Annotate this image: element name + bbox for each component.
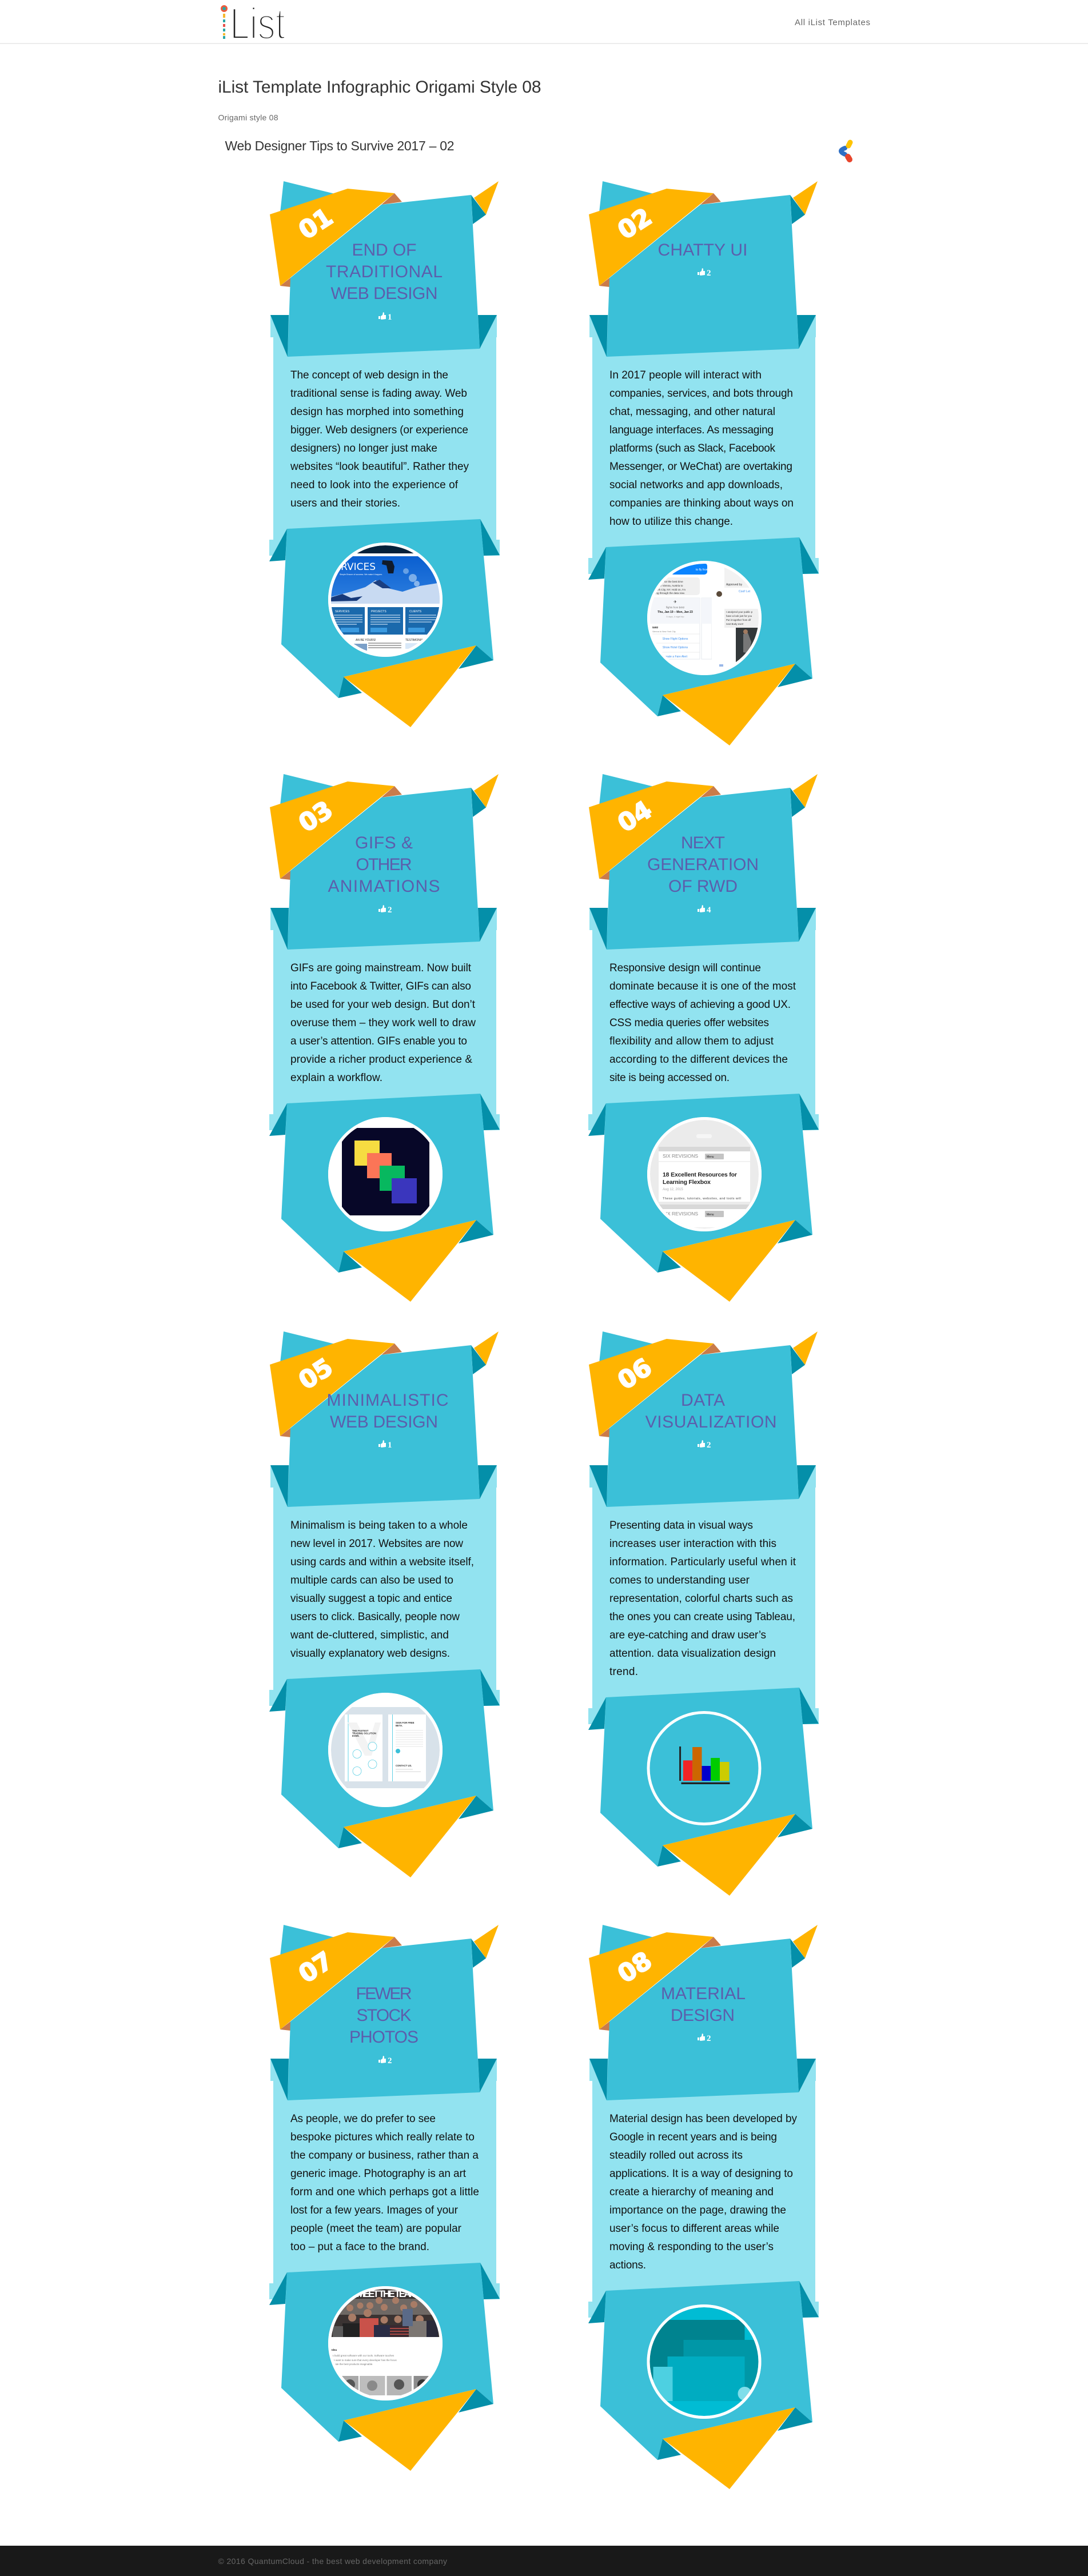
body text: chat, messaging, and other natural bbox=[609, 406, 775, 418]
body text: Material design has been developed by bbox=[609, 2113, 797, 2125]
number ribbon bbox=[270, 781, 394, 879]
folded header bbox=[589, 181, 818, 357]
image: responsive phone page: Menu bbox=[707, 1213, 714, 1217]
likes bbox=[698, 905, 711, 915]
body text: create a hierarchy of meaning and bbox=[609, 2186, 774, 2198]
body text: traditional sense is fading away. Web bbox=[290, 388, 467, 400]
image: chat interface: flights from $482 bbox=[666, 606, 685, 609]
body text: bespoke pictures which really relate to bbox=[290, 2131, 475, 2143]
folded header bbox=[270, 1331, 499, 1507]
body text: Presenting data in visual ways bbox=[609, 1520, 753, 1532]
body text: how to utilize this change. bbox=[609, 516, 733, 528]
likes bbox=[378, 905, 392, 915]
nav link: All iList Templates bbox=[795, 18, 870, 27]
image: chat interface: from Vienna, Austria to bbox=[656, 584, 683, 587]
body text: In 2017 people will interact with bbox=[609, 369, 762, 381]
heading: END OF bbox=[352, 241, 416, 260]
heading bbox=[645, 1391, 777, 1431]
body text: steadily rolled out across its bbox=[609, 2150, 743, 2162]
body text bbox=[290, 2113, 479, 2253]
body text: explain a workflow. bbox=[290, 1072, 382, 1084]
panel: card 02 bbox=[588, 181, 819, 745]
image: team page: to build great software with our tools. Software touches bbox=[332, 2354, 394, 2357]
heading: MINIMALISTIC bbox=[327, 1391, 448, 1410]
heading: VISUALIZATION bbox=[645, 1413, 777, 1431]
heading bbox=[328, 834, 440, 896]
number ribbon: 08 bbox=[613, 1947, 657, 1989]
heading: OF RWD bbox=[668, 877, 738, 896]
body text: visually suggest a topic and entice bbox=[290, 1593, 452, 1605]
body text bbox=[609, 962, 796, 1084]
body text: social networks and app downloads, bbox=[609, 479, 783, 491]
body text: As people, we do prefer to see bbox=[290, 2113, 436, 2125]
image: chat interface: next Body ever! bbox=[726, 623, 744, 625]
number ribbon bbox=[589, 189, 714, 286]
body panel bbox=[270, 315, 497, 540]
body text: multiple cards can also be used to bbox=[290, 1574, 453, 1586]
body text: companies are thinking about ways on bbox=[609, 497, 794, 509]
lower fold bbox=[269, 1094, 500, 1302]
image: services website: PROJECTS bbox=[371, 610, 386, 613]
body text: users and their stories. bbox=[290, 497, 400, 509]
body text: moving & responding to the user’s bbox=[609, 2241, 774, 2253]
likes bbox=[378, 1440, 392, 1450]
image: chat interface: to fly from bbox=[696, 568, 708, 572]
panel: card 03 bbox=[269, 774, 500, 1302]
image: chat interface: Show Flight Options bbox=[663, 637, 688, 641]
image: chat interface: York City, NY. Hold on, I'm bbox=[655, 588, 686, 591]
image: chat interface: king through the data now. bbox=[654, 592, 685, 595]
image: minimal card layouts: TRADING SOLUTION bbox=[352, 1732, 376, 1734]
body text: representation, colorful charts such as bbox=[609, 1593, 793, 1605]
image: services website: CLIENTS bbox=[409, 610, 422, 613]
body text: users to click. Basically, people now bbox=[290, 1611, 460, 1623]
number ribbon bbox=[270, 1932, 394, 2029]
body text: need to look into the experience of bbox=[290, 479, 459, 491]
lower fold bbox=[269, 1669, 500, 1877]
lower fold bbox=[588, 537, 819, 745]
body text: flexibility and allow them to adjust bbox=[609, 1035, 774, 1047]
number ribbon: 01 bbox=[294, 203, 338, 245]
image: responsive phone page: Learning Flexbox bbox=[663, 1179, 711, 1186]
image: minimal card layouts: THE FASTEST bbox=[352, 1729, 369, 1732]
body text: Responsive design will continue bbox=[609, 962, 761, 974]
body text: actions. bbox=[609, 2259, 646, 2271]
body text: new level in 2017. Websites are now bbox=[290, 1538, 463, 1550]
body panel bbox=[270, 1465, 497, 1690]
heading: TRADITIONAL bbox=[326, 262, 443, 281]
number ribbon bbox=[589, 1932, 714, 2029]
panel: card 06 bbox=[588, 1331, 819, 1896]
body text: information. Particularly useful when it bbox=[609, 1556, 796, 1568]
panel: card 08 bbox=[588, 1925, 819, 2489]
subtitle: Origami style 08 bbox=[218, 113, 278, 122]
likes: 2 bbox=[707, 269, 711, 278]
body text: the ones you can create using Tableau, bbox=[609, 1611, 795, 1623]
likes: 2 bbox=[707, 1441, 711, 1450]
heading bbox=[327, 1391, 448, 1431]
image: team page: MEET THE TEAM bbox=[357, 2288, 417, 2299]
body panel bbox=[270, 2059, 497, 2283]
heading: WEB DESIGN bbox=[330, 284, 438, 303]
folded header bbox=[589, 774, 818, 950]
body text: provide a richer product experience & bbox=[290, 1054, 472, 1066]
body text bbox=[290, 962, 476, 1084]
image: chat interface: Create a Fare Alert bbox=[663, 655, 688, 659]
body text: lost for a few years. Images of your bbox=[290, 2204, 459, 2216]
body text: dominate because it is one of the most bbox=[609, 980, 796, 992]
body text: form and one which perhaps got a little bbox=[290, 2186, 479, 2198]
heading: NEXT bbox=[681, 834, 725, 852]
body text: increases user interaction with this bbox=[609, 1538, 776, 1550]
body text: user’s focus to different areas while bbox=[609, 2223, 779, 2235]
heading bbox=[349, 1984, 419, 2047]
body text: Messenger, or WeChat) are overtaking bbox=[609, 461, 792, 473]
image: chat interface: king for the best time bbox=[659, 580, 683, 583]
image: team page: create the best products imaginable. bbox=[332, 2363, 373, 2366]
number ribbon: 03 bbox=[294, 796, 338, 838]
body text: applications. It is a way of designing to bbox=[609, 2168, 793, 2180]
heading: PHOTOS bbox=[349, 2028, 419, 2047]
list heading: Web Designer Tips to Survive 2017 – 02 bbox=[225, 138, 454, 153]
folded header bbox=[589, 1925, 818, 2100]
number ribbon: 04 bbox=[613, 796, 657, 838]
image: services website bbox=[328, 543, 443, 657]
likes: 1 bbox=[388, 1441, 392, 1450]
body text: a user’s attention. GIFs enable you to bbox=[290, 1035, 467, 1047]
image: bar chart bbox=[648, 1713, 760, 1824]
image: chat interface: ✈ bbox=[673, 600, 677, 604]
image: minimal card layouts: CONTACT US. bbox=[396, 1764, 412, 1767]
body text: according to the different devices the bbox=[609, 1054, 788, 1066]
number ribbon: 07 bbox=[294, 1947, 338, 1989]
heading bbox=[661, 1984, 746, 2025]
body panel bbox=[589, 1465, 816, 1708]
body text: GIFs are going mainstream. Now built bbox=[290, 962, 472, 974]
folded header bbox=[589, 1331, 818, 1507]
folded header bbox=[270, 1925, 499, 2100]
image: responsive phone page: SIX REVISIONS bbox=[663, 1153, 698, 1159]
likes bbox=[698, 1440, 711, 1450]
page title: iList Template Infographic Origami Style 08 bbox=[218, 78, 541, 97]
body text: generic image. Photography is an art bbox=[290, 2168, 467, 2180]
body text: CSS media queries offer websites bbox=[609, 1017, 769, 1029]
body panel bbox=[589, 2059, 816, 2302]
body text: trend. bbox=[609, 1666, 638, 1678]
image: services website: SERVICES bbox=[335, 610, 350, 613]
image: minimal card layouts bbox=[328, 1693, 443, 1807]
image: chat interface: have a look just for you bbox=[726, 615, 752, 617]
body text: effective ways of achieving a good UX. bbox=[609, 999, 791, 1011]
body text: designers) no longer just make bbox=[290, 442, 437, 454]
body text: design has morphed into something bbox=[290, 406, 464, 418]
body text: Google in recent years and is being bbox=[609, 2131, 777, 2143]
heading: FEWER bbox=[356, 1984, 412, 2003]
body text: are eye-catching and draw user’s bbox=[609, 1629, 766, 1641]
likes: 1 bbox=[388, 313, 392, 322]
lower fold bbox=[588, 2281, 819, 2489]
body text: companies, services, and bots through bbox=[609, 388, 793, 400]
heading: WEB DESIGN bbox=[330, 1413, 438, 1431]
image: services website: AN BE YOURS! bbox=[356, 639, 376, 642]
heading bbox=[647, 834, 759, 896]
body text: The concept of web design in the bbox=[290, 369, 448, 381]
image: team page: we want to make sure that every developer has the focus bbox=[332, 2359, 397, 2362]
body text bbox=[290, 369, 469, 509]
number ribbon bbox=[270, 189, 394, 286]
image: team page bbox=[328, 2286, 443, 2400]
image: responsive phone page: Aug 12, 2015 bbox=[663, 1188, 683, 1191]
heading: MATERIAL bbox=[661, 1984, 746, 2003]
body text: be used for your web design. But don’t bbox=[290, 999, 476, 1011]
heading: DATA bbox=[681, 1391, 725, 1410]
panel: card 05 bbox=[269, 1331, 500, 1877]
panel: card 01 bbox=[269, 181, 500, 727]
image: responsive phone page bbox=[647, 1117, 762, 1231]
heading: OTHER bbox=[356, 855, 412, 874]
folded header bbox=[270, 181, 499, 357]
heading: CHATTY UI bbox=[657, 241, 748, 260]
image: chat interface: Put it together from dif bbox=[726, 619, 751, 621]
body text: Minimalism is being taken to a whole bbox=[290, 1520, 468, 1532]
body panel bbox=[589, 315, 816, 558]
copyright: © 2016 QuantumCloud - the best web development company bbox=[218, 2557, 447, 2566]
likes bbox=[378, 2056, 392, 2065]
body text: bigger. Web designers (or experience bbox=[290, 424, 468, 436]
likes: 2 bbox=[388, 906, 392, 915]
heading: STOCK bbox=[357, 2006, 412, 2025]
lower fold bbox=[269, 2263, 500, 2471]
number ribbon: 05 bbox=[294, 1353, 338, 1395]
image: services website: Simple Ensure of success. We make it happen. bbox=[340, 573, 382, 576]
image: responsive phone page: 18 Excellent Resources for bbox=[663, 1171, 737, 1178]
body text bbox=[609, 369, 794, 528]
image: services website: SERVICES bbox=[329, 561, 376, 573]
footer bbox=[0, 2546, 1088, 2576]
image: chat interface: $482 bbox=[652, 626, 659, 629]
image: material layers bbox=[647, 2304, 762, 2419]
body text: overuse them – they work well to draw bbox=[290, 1017, 476, 1029]
body text: the company or business, rather than a bbox=[290, 2150, 479, 2162]
heading: GIFS & bbox=[355, 834, 413, 852]
number ribbon: 02 bbox=[613, 203, 657, 245]
number ribbon bbox=[589, 1339, 714, 1436]
likes: 4 bbox=[707, 906, 711, 915]
body text: comes to understanding user bbox=[609, 1574, 750, 1586]
image: chat interface: Approved by bbox=[726, 583, 743, 587]
image: team page: Idea bbox=[332, 2348, 337, 2351]
body text: language interfaces. As messaging bbox=[609, 424, 774, 436]
image: minimal card layouts: BETA. bbox=[396, 1724, 402, 1727]
header bar bbox=[0, 0, 1088, 49]
icon: share bbox=[841, 142, 850, 159]
image: chat interface: Thu, Jan 19 – Mon, Jan 23 bbox=[657, 611, 693, 614]
lower fold bbox=[269, 519, 500, 727]
number ribbon bbox=[589, 781, 714, 879]
image: animated squares bbox=[328, 1117, 443, 1231]
image: chat interface: 5 days, 4 night trip bbox=[666, 616, 684, 618]
body text: platforms (such as Slack, Facebook bbox=[609, 442, 775, 454]
folded header bbox=[270, 774, 499, 950]
image: chat interface: Cool! Let bbox=[739, 590, 751, 593]
body text bbox=[290, 1520, 474, 1660]
likes: 2 bbox=[388, 2056, 392, 2065]
heading bbox=[326, 241, 443, 303]
likes bbox=[378, 312, 392, 322]
body panel bbox=[270, 908, 497, 1114]
heading: ANIMATIONS bbox=[328, 877, 440, 896]
likes bbox=[698, 268, 711, 278]
number ribbon bbox=[270, 1339, 394, 1436]
image: chat interface bbox=[647, 561, 762, 675]
lower fold bbox=[588, 1688, 819, 1896]
body text: site is being accessed on. bbox=[609, 1072, 730, 1084]
likes: 2 bbox=[707, 2034, 711, 2043]
body text: people (meet the team) are popular bbox=[290, 2223, 462, 2235]
image: chat interface: message... bbox=[669, 666, 681, 669]
number ribbon: 06 bbox=[613, 1353, 657, 1395]
body text: attention. data visualization design bbox=[609, 1648, 776, 1660]
body text: websites “look beautiful”. Rather they bbox=[290, 461, 469, 473]
panel: card 07 bbox=[269, 1925, 500, 2471]
image: services website: TESTIMONIALS bbox=[405, 639, 427, 642]
image: chat interface: I analyzed your public p bbox=[726, 611, 753, 613]
heading: DESIGN bbox=[671, 2006, 735, 2025]
body text: visually explanatory web designs. bbox=[290, 1648, 450, 1660]
image: responsive phone page: These guides, tutorials, websites, and tools will bbox=[663, 1197, 741, 1201]
body text: using cards and within a website itself, bbox=[290, 1556, 474, 1568]
body text: into Facebook & Twitter, GIFs can also bbox=[290, 980, 471, 992]
likes bbox=[698, 2033, 711, 2043]
image: chat interface: Show Hotel Options bbox=[663, 646, 688, 649]
body text bbox=[609, 1520, 796, 1678]
image: responsive phone page: SIX REVISIONS bbox=[663, 1211, 698, 1217]
body text: too – put a face to the brand. bbox=[290, 2241, 429, 2253]
body text: want de-cluttered, simplistic, and bbox=[290, 1629, 449, 1641]
panel: card 04 bbox=[588, 774, 819, 1302]
body panel bbox=[589, 908, 816, 1114]
lower fold bbox=[588, 1094, 819, 1302]
image: chat interface: Vienna to New York City bbox=[652, 631, 676, 633]
body text bbox=[609, 2113, 797, 2271]
body text: importance on the page, drawing the bbox=[609, 2204, 786, 2216]
image: minimal card layouts: EVER. bbox=[352, 1734, 360, 1737]
heading: GENERATION bbox=[647, 855, 759, 874]
image: responsive phone page: Menu bbox=[707, 1155, 714, 1159]
image: minimal card layouts: SIGN FOR FREE bbox=[396, 1721, 415, 1724]
